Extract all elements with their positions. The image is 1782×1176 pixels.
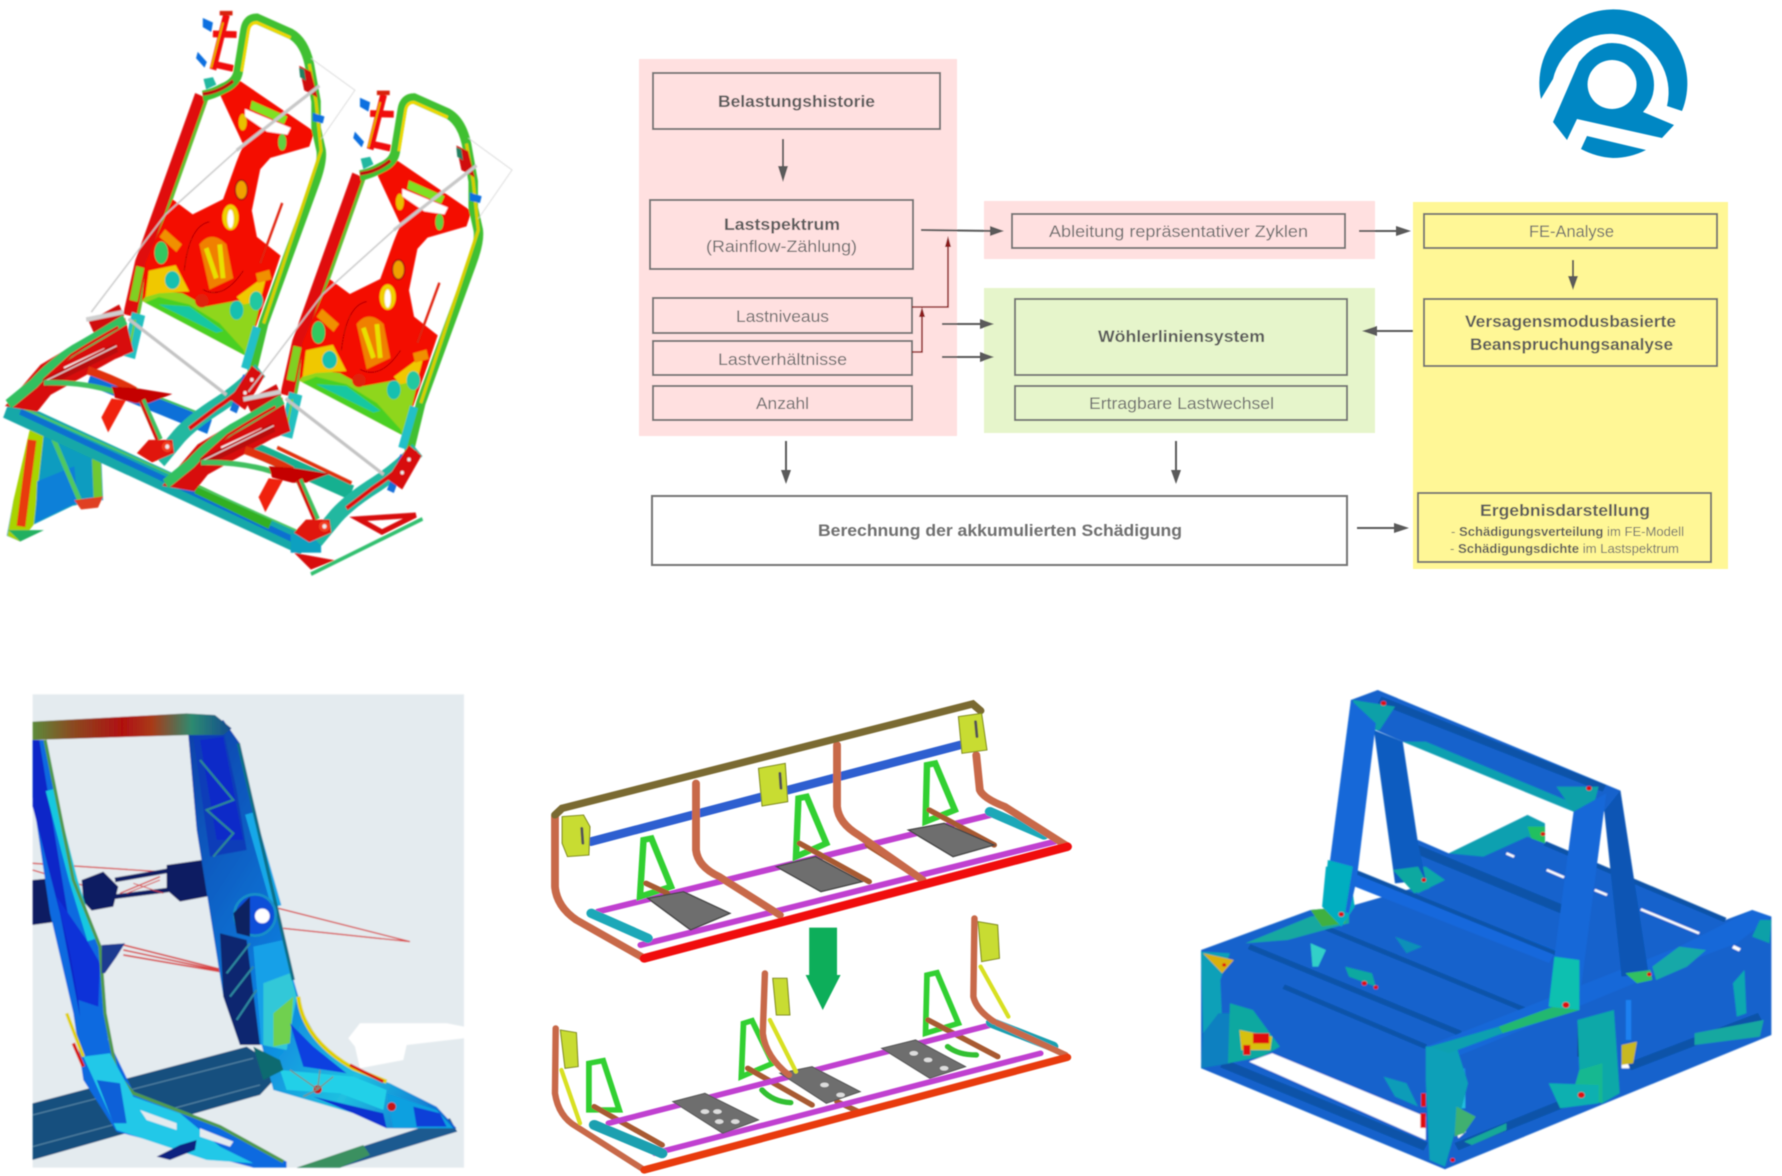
box: Lastniveaus: Lastniveaus [736, 307, 829, 326]
image: seat frame stress plot [33, 694, 464, 1168]
box: Ertragbare Lastwechsel [1015, 386, 1347, 420]
arrow: Zyklen to FE-Analyse [1359, 226, 1411, 236]
box: Ergebnisdarstellung [1418, 493, 1711, 562]
red tether lines [33, 863, 410, 973]
box: Lastspektrum [650, 200, 913, 269]
arrow: FE-Analyse to Beanspruchungsanalyse [1568, 260, 1578, 290]
arrow: Lastniveaus to Wöhlerliniensystem [942, 319, 994, 329]
stress patches [1201, 815, 1771, 1167]
box: Versagensmodusbasierte Beanspruchungsanalyse: Beanspruchungsanalyse [1470, 335, 1673, 354]
seat support leg [7, 425, 103, 541]
box: Versagensmodusbasierte Beanspruchungsanalyse: Versagensmodusbasierte [1465, 312, 1676, 331]
flow diagram [639, 59, 1728, 569]
seat foot plate [291, 515, 422, 574]
box: Lastverhältnisse [653, 341, 912, 375]
seat base rail rear [90, 370, 352, 493]
arrow: green down arrow [806, 928, 841, 1010]
A-frame front legs [1324, 700, 1652, 1010]
box: Lastverhältnisse: Lastverhältnisse [718, 350, 847, 369]
A-frame rear legs [1374, 730, 1648, 977]
box: Belastungshistorie: Belastungshistorie [718, 92, 875, 111]
arrow: Lastverhältnisse to Wöhlerliniensystem [942, 352, 994, 362]
arrow: Belastungshistorie to Lastspektrum [778, 139, 788, 182]
arrow: load block down to Berechnung [781, 441, 791, 484]
box: Ergebnisdarstellung: - Schädigungsverteilung im FE-Modell [1451, 524, 1684, 539]
icon: company logo [1539, 9, 1687, 158]
top frame tube [33, 713, 232, 740]
box: Ergebnisdarstellung: Ergebnisdarstellung [1480, 501, 1650, 520]
top beam [1351, 690, 1620, 817]
arrow: S-N block down to Berechnung [1171, 441, 1181, 484]
lower cross beam [33, 1047, 283, 1160]
arrow: Lastverhältnisse red connector [912, 307, 925, 352]
box: Anzahl [653, 386, 912, 420]
box: FE-Analyse [1424, 214, 1717, 248]
panel: FE analysis (yellow) [1413, 202, 1728, 569]
box: Ergebnisdarstellung: - Schädigungsdichte im Lastspektrum [1450, 541, 1679, 556]
box: Berechnung der akkumulierten Schädigung [652, 496, 1347, 565]
box: Wöhlerliniensystem [1015, 299, 1347, 375]
box: Lastniveaus [653, 298, 912, 333]
box: Lastspektrum: Lastspektrum [724, 215, 840, 234]
box: Belastungshistorie [653, 73, 940, 129]
right face bars [1426, 910, 1771, 1147]
CAD model upper [555, 704, 1067, 958]
box: Berechnung der akkumulierten Schädigung: Berechnung der akkumulierten Schädigung [818, 521, 1182, 540]
back cross bracket [33, 855, 242, 925]
box: FE-Analyse: FE-Analyse [1529, 222, 1614, 241]
background panel [33, 694, 464, 1168]
white smudge [348, 1023, 464, 1068]
image: stress plot of double seat [5, 13, 512, 574]
box: Ertragbare Lastwechsel: Ertragbare Lastwechsel [1089, 394, 1274, 413]
seat base rail front [7, 402, 304, 545]
panel: load data (pink) [639, 59, 957, 436]
image: seat frame CAD, before and after [555, 704, 1067, 1170]
box: Wöhlerliniensystem: Wöhlerliniensystem [1098, 327, 1265, 346]
left side frame [33, 740, 287, 1168]
hot spots [1222, 701, 1652, 1162]
panel: S-N system (green) [984, 288, 1375, 433]
arrow: Lastspektrum to Zyklen [921, 226, 1004, 236]
box: Lastspektrum: (Rainflow-Zählung) [706, 237, 857, 256]
right side frame [188, 720, 457, 1128]
image: FE model of test rig [1201, 690, 1771, 1169]
arrow: Berechnung to Ergebnisdarstellung [1357, 523, 1409, 533]
CAD model lower [555, 918, 1067, 1170]
arrow: Lastniveaus red connector [912, 236, 951, 307]
box: Ableitung repräsentativer Zyklen: Ableitung repräsentativer Zyklen [1049, 222, 1308, 241]
arrow: Beanspruchungsanalyse to Wöhlerliniensystem [1362, 326, 1413, 336]
front cross beam [297, 1118, 457, 1168]
box: Ableitung repräsentativer Zyklen [1012, 214, 1345, 248]
box: Versagensmodusbasierte Beanspruchungsanalyse [1424, 299, 1717, 366]
panel: representative cycles (pink) [984, 201, 1375, 259]
box: Anzahl: Anzahl [756, 394, 809, 413]
main rig body [1201, 815, 1771, 1169]
seat body left [5, 13, 355, 462]
seat body right [162, 93, 512, 542]
